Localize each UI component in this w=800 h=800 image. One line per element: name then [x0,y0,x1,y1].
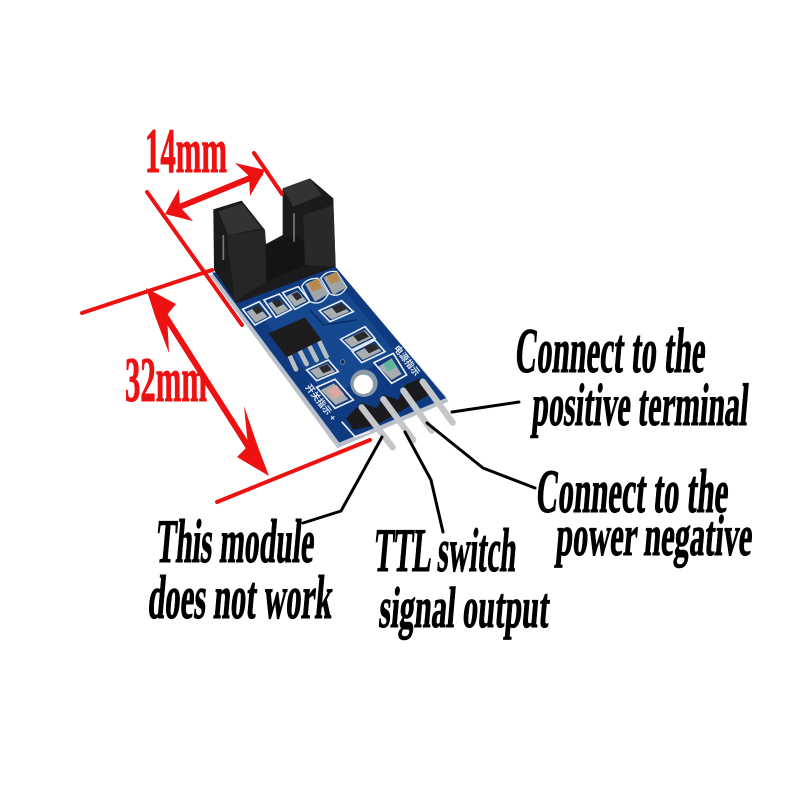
label: unused pin: does not work [146,564,336,632]
label: unused pin [146,508,336,632]
ic chip [268,317,327,369]
14mm dimension [145,115,282,325]
32mm dimension: 32mm [125,344,207,415]
leader lines [303,402,535,532]
label: ttl output [372,517,553,640]
label: ttl output: signal output [377,575,553,640]
label: positive terminal [513,315,752,439]
silkscreen labels: 电源指示 [392,343,423,378]
four pin header [342,378,453,447]
silkscreen labels: 开关指示 + [303,382,339,423]
optical slot sensor [213,178,336,303]
arrowheads: 32mm [146,288,269,476]
label: ttl output: TTL switch [372,517,520,585]
smd components [243,271,407,408]
arrowheads: 14mm [165,163,265,221]
silkscreen labels [303,343,423,423]
32mm dimension [82,270,370,502]
sensor module photo [209,178,453,448]
pcb board [209,265,448,448]
label: unused pin: This module [154,508,318,576]
14mm dimension: 14mm [145,115,227,186]
label: power negative [534,458,756,568]
capacitors [302,278,328,303]
